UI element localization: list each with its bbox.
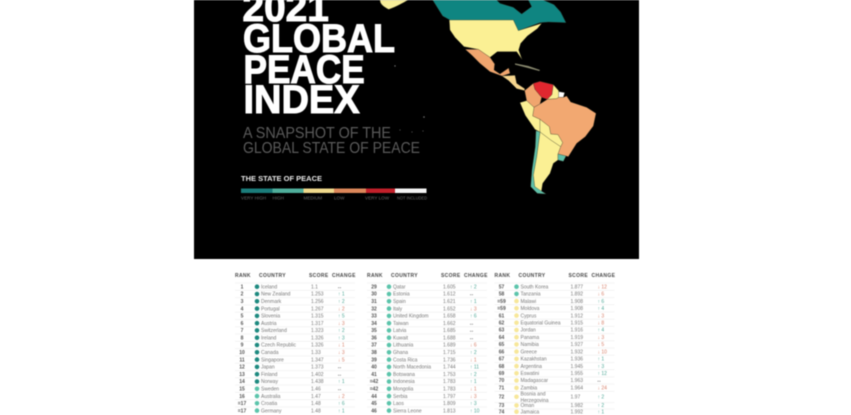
- table column 3: ranks 57 to 74: Equatorial Guinea: [520, 320, 561, 326]
- table column 3: ranks 57 to 74: ↓ 3: [598, 313, 604, 319]
- table column 1: ranks 1 to 17: ↑ 5: [338, 314, 345, 320]
- table column 1: ranks 1 to 17: 9: [241, 343, 244, 349]
- table column 3: ranks 57 to 74: 1.915: [570, 320, 583, 326]
- table column 2: ranks 29 to 46: ↓ 3: [470, 306, 477, 312]
- table column 1: ranks 1 to 17: 1.48: [311, 401, 321, 407]
- table column 1: ranks 1 to 17: 15: [239, 386, 245, 392]
- table column 2: ranks 29 to 46: 33: [371, 314, 377, 320]
- table column 2: ranks 29 to 46: 1.612: [443, 292, 456, 298]
- table column 1: ranks 1 to 17: ↓ 2: [338, 306, 345, 312]
- table column 1: ranks 1 to 17: ↑ 3: [338, 335, 345, 341]
- table column 1: ranks 1 to 17: 4: [241, 306, 244, 312]
- table column 3: ranks 57 to 74: 64: [499, 335, 504, 341]
- table column 3: ranks 57 to 74: Namibia: [520, 342, 539, 348]
- table header: CHANGE: [332, 273, 356, 279]
- table column 3: ranks 57 to 74: 57: [499, 284, 504, 290]
- table column 1: ranks 1 to 17: Austria: [261, 321, 277, 327]
- map region: Central America: [502, 75, 525, 91]
- table column 1: ranks 1 to 17: Japan: [261, 365, 275, 371]
- table column 2: ranks 29 to 46: Sierra Leone: [393, 408, 422, 414]
- table column 2: ranks 29 to 46: Spain: [393, 299, 406, 305]
- table column 1: ranks 1 to 17: =17: [238, 401, 246, 407]
- table column 1: ranks 1 to 17: 1.373: [311, 365, 324, 371]
- table column 1: ranks 1 to 17: Germany: [261, 408, 282, 414]
- table column 2: ranks 29 to 46: ↑ 2: [470, 372, 477, 378]
- table column 3: ranks 57 to 74: 1.919: [570, 335, 583, 341]
- table column 2: ranks 29 to 46: 41: [371, 372, 377, 378]
- table column 1: ranks 1 to 17: Finland: [261, 372, 278, 378]
- table column 3: ranks 57 to 74: 69: [499, 371, 504, 377]
- table column 3: ranks 57 to 74: ↓ 5: [598, 342, 604, 348]
- table column 1: ranks 1 to 17: Norway: [261, 379, 278, 385]
- table column 1: ranks 1 to 17: 1: [241, 284, 244, 290]
- table column 1: ranks 1 to 17: 8: [241, 335, 244, 341]
- map region: Mexico: [465, 49, 510, 76]
- table column 2: ranks 29 to 46: ↔: [469, 321, 474, 327]
- table column 1: ranks 1 to 17: 1.267: [311, 306, 324, 312]
- table column 2: ranks 29 to 46: 45: [371, 401, 377, 407]
- table column 3: ranks 57 to 74: ↑ 1: [598, 357, 604, 363]
- table column 2: ranks 29 to 46: 1.715: [443, 350, 456, 356]
- subtitle: [243, 125, 420, 157]
- table column 3: ranks 57 to 74: 1.932: [570, 349, 583, 355]
- table column 2: ranks 29 to 46: ↑ 2: [470, 350, 477, 356]
- table column 2: ranks 29 to 46: 1.662: [443, 321, 456, 327]
- table column 2: ranks 29 to 46: ↓ 6: [470, 343, 477, 349]
- title: GLOBAL: [243, 17, 395, 61]
- table column 3: ranks 57 to 74: 66: [499, 349, 504, 355]
- table column 2: ranks 29 to 46: ↑ 1: [470, 379, 477, 385]
- table header: SCORE: [309, 273, 329, 279]
- subtitle: GLOBAL STATE OF PEACE: [243, 140, 420, 157]
- table header: COUNTRY: [391, 273, 418, 279]
- table column 3: ranks 57 to 74: 67: [499, 357, 504, 363]
- table header: [235, 273, 356, 279]
- table column 3: ranks 57 to 74: 1.963: [570, 378, 583, 384]
- table column 2: ranks 29 to 46: Qatar: [393, 284, 406, 290]
- title: INDEX: [244, 78, 360, 122]
- table column 3: ranks 57 to 74: 1.97: [570, 394, 580, 400]
- table column 3: ranks 57 to 74: Madagascar: [520, 378, 548, 384]
- table column 3: ranks 57 to 74: 70: [499, 378, 504, 384]
- table column 2: ranks 29 to 46: [367, 273, 488, 414]
- table column 2: ranks 29 to 46: 32: [371, 306, 377, 312]
- table column 3: ranks 57 to 74: =59: [497, 306, 506, 312]
- table column 3: ranks 57 to 74: Argentina: [520, 364, 542, 370]
- table column 3: ranks 57 to 74: ↑ 4: [598, 306, 604, 312]
- table column 1: ranks 1 to 17: 7: [241, 328, 244, 334]
- table header: COUNTRY: [518, 273, 546, 279]
- title: PEACE: [244, 47, 365, 91]
- table column 2: ranks 29 to 46: Indonesia: [393, 379, 415, 385]
- table column 2: ranks 29 to 46: 1.813: [443, 408, 456, 414]
- table column 2: ranks 29 to 46: 1.689: [443, 343, 456, 349]
- table column 2: ranks 29 to 46: Ghana: [393, 350, 408, 356]
- table column 1: ranks 1 to 17: 1.323: [311, 328, 324, 334]
- table column 1: ranks 1 to 17: 12: [239, 365, 245, 371]
- table column 2: ranks 29 to 46: 1.605: [443, 284, 456, 290]
- table column 3: ranks 57 to 74: 63: [499, 328, 504, 334]
- table column 2: ranks 29 to 46: 31: [371, 299, 377, 305]
- table column 1: ranks 1 to 17: Denmark: [261, 299, 282, 305]
- table column 2: ranks 29 to 46: 1.809: [443, 401, 456, 407]
- table column 3: ranks 57 to 74: ↓ 8: [598, 320, 604, 326]
- table column 2: ranks 29 to 46: ↓ 1: [470, 357, 477, 363]
- map region: Guyana: [547, 85, 559, 99]
- table column 1: ranks 1 to 17: 1.402: [311, 372, 324, 378]
- table column 1: ranks 1 to 17: ↓ 3: [338, 350, 345, 356]
- table column 1: ranks 1 to 17: 1.48: [311, 408, 321, 414]
- table column 1: ranks 1 to 17: 16: [239, 394, 245, 400]
- table column 3: ranks 57 to 74: 71: [499, 386, 504, 392]
- table column 3: ranks 57 to 74: [494, 273, 616, 415]
- table column 1: ranks 1 to 17: New Zealand: [261, 292, 291, 298]
- table header: COUNTRY: [259, 273, 286, 279]
- table column 2: ranks 29 to 46: Estonia: [393, 292, 410, 298]
- table column 2: ranks 29 to 46: 1.753: [443, 372, 456, 378]
- map region: Venezuela: [533, 81, 553, 99]
- table header: SCORE: [568, 273, 588, 279]
- table column 2: ranks 29 to 46: 1.685: [443, 328, 456, 334]
- table column 1: ranks 1 to 17: ↑ 6: [338, 401, 345, 407]
- table column 2: ranks 29 to 46: ↑ 2: [470, 284, 477, 290]
- table column 1: ranks 1 to 17: 6: [241, 321, 244, 327]
- table column 1: ranks 1 to 17: ↑ 1: [338, 379, 345, 385]
- table column 1: ranks 1 to 17: ↑ 1: [338, 292, 345, 298]
- table column 1: ranks 1 to 17: =17: [238, 408, 246, 414]
- table column 2: ranks 29 to 46: 1.621: [443, 299, 456, 305]
- table column 3: ranks 57 to 74: 1.908: [570, 299, 583, 305]
- table column 2: ranks 29 to 46: ↑ 3: [470, 401, 477, 407]
- table column 1: ranks 1 to 17: ↔: [337, 284, 342, 290]
- table column 1: ranks 1 to 17: Ireland: [261, 335, 277, 341]
- table column 3: ranks 57 to 74: ↓ 24: [598, 386, 607, 392]
- table column 1: ranks 1 to 17: 1.47: [311, 394, 321, 400]
- table column 3: ranks 57 to 74: Oman: [520, 403, 534, 409]
- table column 1: ranks 1 to 17: Sweden: [261, 386, 279, 392]
- table column 2: ranks 29 to 46: Latvia: [393, 328, 407, 334]
- table column 1: ranks 1 to 17: 1.46: [311, 386, 321, 392]
- table column 2: ranks 29 to 46: 38: [371, 350, 377, 356]
- table column 1: ranks 1 to 17: ↔: [337, 386, 342, 392]
- table column 1: ranks 1 to 17: Switzerland: [261, 328, 287, 334]
- table header: [367, 273, 488, 279]
- table column 2: ranks 29 to 46: ↑ 1: [470, 299, 477, 305]
- table column 3: ranks 57 to 74: Greece: [520, 349, 537, 355]
- table column 3: ranks 57 to 74: =59: [497, 299, 506, 305]
- table header: RANK: [494, 273, 510, 279]
- table column 3: ranks 57 to 74: South Korea: [520, 284, 549, 290]
- title: [242, 0, 395, 122]
- table column 1: ranks 1 to 17: Australia: [261, 394, 281, 400]
- table column 1: ranks 1 to 17: 1.33: [311, 350, 321, 356]
- hero panel: black background: [194, 0, 639, 259]
- table column 1: ranks 1 to 17: 1.315: [311, 314, 324, 320]
- legend colour bar: [241, 188, 426, 193]
- table column 2: ranks 29 to 46: ↔: [469, 328, 474, 334]
- table column 3: ranks 57 to 74: Herzegovina: [520, 398, 549, 404]
- legend heading: THE STATE OF PEACE: [241, 174, 322, 183]
- table column 3: ranks 57 to 74: Panama: [520, 335, 539, 341]
- table column 1: ranks 1 to 17: ↑ 2: [338, 328, 345, 334]
- table column 1: ranks 1 to 17: 1.326: [311, 335, 324, 341]
- table column 2: ranks 29 to 46: 1.736: [443, 357, 456, 363]
- table column 1: ranks 1 to 17: 1.326: [311, 343, 324, 349]
- table column 2: ranks 29 to 46: North Macedonia: [393, 365, 431, 371]
- map region: Bolivia and Paraguay: [540, 119, 563, 147]
- table column 3: ranks 57 to 74: 68: [499, 364, 504, 370]
- table column 2: ranks 29 to 46: 1.744: [443, 365, 456, 371]
- table column 3: ranks 57 to 74: ↓ 6: [598, 292, 604, 298]
- table column 3: ranks 57 to 74: 58: [499, 292, 504, 298]
- table column 1: ranks 1 to 17: [235, 273, 356, 414]
- map region: Ecuador and Peru: [520, 101, 540, 132]
- table column 1: ranks 1 to 17: 1.1: [311, 284, 318, 290]
- decorative island specks: [394, 65, 425, 132]
- table column 3: ranks 57 to 74: 61: [499, 313, 504, 319]
- legend labels: VERY LOW: [365, 196, 390, 200]
- table column 1: ranks 1 to 17: ↓ 2: [338, 394, 345, 400]
- table column 3: ranks 57 to 74: 1.936: [570, 357, 583, 363]
- table column 3: ranks 57 to 74: ↓ 12: [598, 284, 607, 290]
- table column 3: ranks 57 to 74: 1.908: [570, 306, 583, 312]
- table column 3: ranks 57 to 74: ↑ 2: [598, 394, 604, 400]
- table column 1: ranks 1 to 17: Portugal: [261, 306, 280, 312]
- table column 1: ranks 1 to 17: ↔: [337, 365, 342, 371]
- table column 3: ranks 57 to 74: 1.955: [570, 371, 583, 377]
- table column 1: ranks 1 to 17: 13: [239, 372, 245, 378]
- legend labels: [241, 196, 428, 200]
- map region: French Guiana: [559, 92, 565, 97]
- table column 2: ranks 29 to 46: ↔: [469, 292, 474, 298]
- table column 2: ranks 29 to 46: 1.688: [443, 335, 456, 341]
- table column 1: ranks 1 to 17: ↓ 1: [338, 343, 345, 349]
- table column 3: ranks 57 to 74: Zambia: [520, 386, 537, 392]
- table column 3: ranks 57 to 74: ↑ 12: [598, 371, 607, 377]
- table column 2: ranks 29 to 46: =42: [370, 379, 378, 385]
- map region: Chile: [531, 131, 546, 194]
- table column 3: ranks 57 to 74: Eswatini: [520, 371, 539, 377]
- table column 3: ranks 57 to 74: 1.982: [570, 403, 583, 409]
- map region: Alaska: [380, 0, 408, 9]
- table column 3: ranks 57 to 74: ↓ 3: [598, 335, 604, 341]
- table column 3: ranks 57 to 74: 73: [499, 403, 504, 409]
- table column 3: ranks 57 to 74: 1.892: [570, 292, 583, 298]
- table column 2: ranks 29 to 46: 35: [371, 328, 377, 334]
- table column 2: ranks 29 to 46: 34: [371, 321, 377, 327]
- table column 1: ranks 1 to 17: ↓ 5: [338, 357, 345, 363]
- table column 1: ranks 1 to 17: ↑ 2: [338, 299, 345, 305]
- table column 3: ranks 57 to 74: Bosnia and: [520, 392, 546, 398]
- table column 2: ranks 29 to 46: Lithuania: [393, 343, 414, 349]
- table column 2: ranks 29 to 46: ↓ 1: [470, 386, 477, 392]
- legend labels: HIGH: [272, 196, 284, 200]
- table column 1: ranks 1 to 17: ↑ 1: [338, 408, 345, 414]
- table column 1: ranks 1 to 17: 11: [239, 357, 245, 363]
- table column 2: ranks 29 to 46: 1.658: [443, 314, 456, 320]
- table column 3: ranks 57 to 74: 1.877: [570, 284, 583, 290]
- map region: Colombia: [525, 83, 542, 107]
- table column 1: ranks 1 to 17: Canada: [261, 350, 279, 356]
- table column 2: ranks 29 to 46: 1.783: [443, 379, 456, 385]
- legend labels: LOW: [334, 196, 345, 200]
- table column 1: ranks 1 to 17: 14: [239, 379, 245, 385]
- table column 3: ranks 57 to 74: Kazakhstan: [520, 357, 547, 363]
- table column 3: ranks 57 to 74: Moldova: [520, 306, 540, 312]
- table column 2: ranks 29 to 46: =42: [370, 386, 378, 392]
- table column 2: ranks 29 to 46: 37: [371, 343, 377, 349]
- table column 1: ranks 1 to 17: 1.317: [311, 321, 324, 327]
- table column 1: ranks 1 to 17: Iceland: [261, 284, 277, 290]
- table header: SCORE: [441, 273, 461, 279]
- table column 3: ranks 57 to 74: ↑ 4: [598, 328, 604, 334]
- table column 1: ranks 1 to 17: 10: [239, 350, 245, 356]
- map region: Cuba and the Caribbean: [515, 63, 540, 71]
- table column 1: ranks 1 to 17: 3: [241, 299, 244, 305]
- table column 3: ranks 57 to 74: ↓ 10: [598, 349, 607, 355]
- table column 2: ranks 29 to 46: 46: [371, 408, 377, 414]
- table column 2: ranks 29 to 46: 39: [371, 357, 377, 363]
- map region: United States: [449, 20, 542, 59]
- table column 2: ranks 29 to 46: Italy: [393, 306, 403, 312]
- table column 3: ranks 57 to 74: Malawi: [520, 299, 536, 305]
- table column 3: ranks 57 to 74: ↔: [596, 378, 602, 384]
- table column 3: ranks 57 to 74: 1.916: [570, 328, 583, 334]
- map region: Argentina: [533, 132, 561, 192]
- table column 3: ranks 57 to 74: 1.945: [570, 364, 583, 370]
- table column 2: ranks 29 to 46: Taiwan: [393, 321, 409, 327]
- table column 1: ranks 1 to 17: Czech Republic: [261, 343, 297, 349]
- table column 3: ranks 57 to 74: ↑ 2: [598, 403, 604, 409]
- table column 2: ranks 29 to 46: 36: [371, 335, 377, 341]
- table header: CHANGE: [464, 273, 488, 279]
- table column 2: ranks 29 to 46: 1.783: [443, 386, 456, 392]
- table column 2: ranks 29 to 46: 1.652: [443, 306, 456, 312]
- table column 1: ranks 1 to 17: 1.256: [311, 299, 324, 305]
- table column 3: ranks 57 to 74: ↑ 6: [598, 299, 604, 305]
- table column 2: ranks 29 to 46: Costa Rica: [393, 357, 418, 363]
- table column 2: ranks 29 to 46: 29: [371, 284, 377, 290]
- table column 3: ranks 57 to 74: ↑ 3: [598, 364, 604, 370]
- map region: Brazil: [533, 96, 596, 157]
- legend labels: NOT INCLUDED: [397, 196, 428, 200]
- legend labels: MEDIUM: [304, 196, 322, 200]
- table column 1: ranks 1 to 17: 1.253: [311, 292, 324, 298]
- table column 2: ranks 29 to 46: ↑ 11: [470, 365, 479, 371]
- table column 3: ranks 57 to 74: Cyprus: [520, 313, 537, 319]
- table column 2: ranks 29 to 46: Kuwait: [393, 335, 409, 341]
- table column 3: ranks 57 to 74: Tanzania: [520, 292, 541, 298]
- table column 2: ranks 29 to 46: ↓ 3: [470, 394, 477, 400]
- table column 3: ranks 57 to 74: Jordan: [520, 328, 536, 334]
- table column 2: ranks 29 to 46: Mongolia: [393, 386, 414, 392]
- table column 1: ranks 1 to 17: 1.347: [311, 357, 324, 363]
- table column 2: ranks 29 to 46: ↑ 10: [470, 408, 480, 414]
- legend labels: VERY HIGH: [241, 196, 266, 200]
- table column 2: ranks 29 to 46: 44: [371, 394, 377, 400]
- table column 2: ranks 29 to 46: Botswana: [393, 372, 415, 378]
- table column 2: ranks 29 to 46: United Kingdom: [393, 314, 429, 320]
- table column 2: ranks 29 to 46: ↔: [469, 335, 474, 341]
- table column 1: ranks 1 to 17: ↓ 3: [338, 321, 345, 327]
- table header: RANK: [235, 273, 251, 279]
- table header: RANK: [367, 273, 383, 279]
- table column 1: ranks 1 to 17: 1.438: [311, 379, 324, 385]
- map region: Canada: [433, 0, 566, 31]
- table column 2: ranks 29 to 46: Serbia: [393, 394, 408, 400]
- table column 3: ranks 57 to 74: 62: [499, 320, 504, 326]
- table column 3: ranks 57 to 74: 1.927: [570, 342, 583, 348]
- table header: CHANGE: [592, 273, 616, 279]
- table column 1: ranks 1 to 17: Slovenia: [261, 314, 280, 320]
- table column 1: ranks 1 to 17: 2: [241, 292, 244, 298]
- table column 1: ranks 1 to 17: ↔: [337, 372, 342, 378]
- table column 2: ranks 29 to 46: Laos: [393, 401, 404, 407]
- table header: [494, 273, 616, 279]
- table column 2: ranks 29 to 46: 30: [371, 292, 377, 298]
- table column 3: ranks 57 to 74: 65: [499, 342, 504, 348]
- table column 3: ranks 57 to 74: 1.912: [570, 313, 583, 319]
- table column 1: ranks 1 to 17: Croatia: [261, 401, 277, 407]
- table column 1: ranks 1 to 17: Singapore: [261, 357, 284, 363]
- table column 3: ranks 57 to 74: 1.964: [570, 386, 583, 392]
- subtitle: A SNAPSHOT OF THE: [243, 125, 391, 142]
- table column 3: ranks 57 to 74: 72: [499, 394, 504, 400]
- table column 2: ranks 29 to 46: 1.797: [443, 394, 456, 400]
- map of the Americas: [380, 0, 596, 194]
- table column 1: ranks 1 to 17: 5: [241, 314, 244, 320]
- map region: Uruguay: [558, 154, 566, 161]
- table column 2: ranks 29 to 46: ↑ 6: [470, 314, 477, 320]
- table column 2: ranks 29 to 46: 40: [371, 365, 377, 371]
